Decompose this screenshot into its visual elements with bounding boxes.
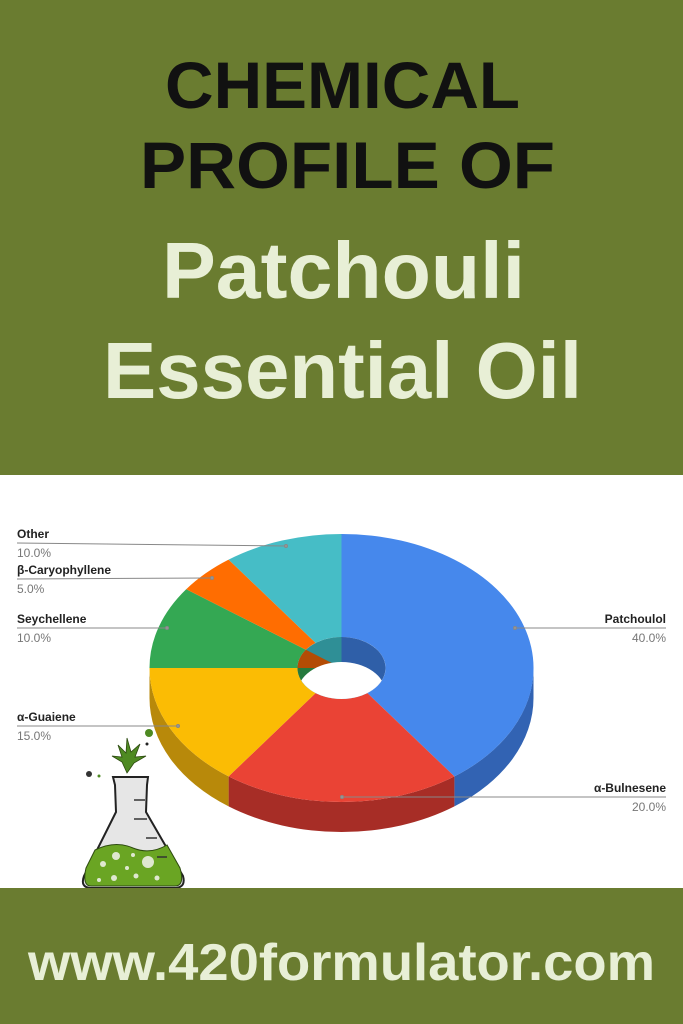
- labels: Patchoulol: [605, 612, 666, 626]
- top slices: [342, 534, 534, 776]
- icon: flask with leaf: [83, 729, 184, 888]
- labels: Other: [17, 527, 49, 541]
- labels: β-Caryophyllene: [17, 563, 111, 577]
- heading: Patchouli Essential Oil: [103, 226, 582, 415]
- footer: website url: [0, 888, 683, 1024]
- leader lines: [17, 543, 666, 798]
- title: chemical profile of: [140, 48, 555, 202]
- heading: Patchouli Essential Oil: Essential Oil: [103, 326, 582, 415]
- labels: α-Guaiene: [17, 710, 76, 724]
- labels: Seychellene: [17, 612, 87, 626]
- title: chemical profile of: PROFILE OF: [140, 128, 555, 202]
- footer: website url: www.420formulator.com: [27, 934, 655, 992]
- labels: 15.0%: [17, 729, 51, 743]
- chart panel: [0, 475, 683, 888]
- labels: 20.0%: [632, 800, 666, 814]
- labels: [17, 527, 666, 814]
- sides: [454, 668, 534, 806]
- labels: 40.0%: [632, 631, 666, 645]
- donut chart: [150, 534, 534, 832]
- labels: 10.0%: [17, 631, 51, 645]
- labels: 10.0%: [17, 546, 51, 560]
- title: chemical profile of: CHEMICAL: [165, 48, 520, 122]
- labels: 5.0%: [17, 582, 45, 596]
- heading: Patchouli Essential Oil: Patchouli: [162, 226, 525, 315]
- header panel: [0, 0, 683, 475]
- labels: α-Bulnesene: [594, 781, 666, 795]
